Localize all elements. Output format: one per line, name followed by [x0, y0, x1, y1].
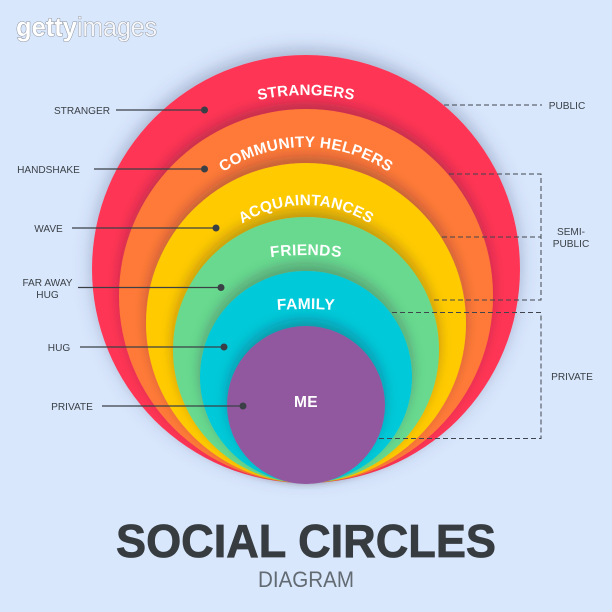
callout: wave: WAVE [34, 224, 63, 235]
circle: friends [173, 217, 439, 483]
label: strangers: STRANGERS [258, 84, 354, 100]
right brackets [378, 105, 542, 438]
watermark: gettyimages [16, 12, 157, 42]
callout: far away hug: FAR AWAY [22, 278, 73, 289]
watermark: gettyimages: images [77, 12, 157, 42]
right labels [549, 101, 593, 383]
label: me: ME [294, 394, 318, 411]
bracket: public [444, 104, 542, 106]
label: semi-public: PUBLIC [553, 239, 589, 250]
title: SOCIAL CIRCLES [116, 515, 496, 567]
callout: wave [34, 224, 220, 235]
circle: strangers [92, 55, 520, 483]
callout: stranger [54, 106, 208, 117]
circle: community helpers [119, 109, 493, 483]
circle labels [220, 84, 392, 411]
callout: private: PRIVATE [51, 402, 93, 413]
label: community helpers: COMMUNITY HELPERS [220, 136, 392, 170]
callout: far away hug: HUG [36, 290, 59, 301]
concentric circles diagram [92, 55, 520, 484]
label: friends: FRIENDS [270, 244, 341, 258]
bracket: private [378, 312, 541, 438]
label: public: PUBLIC [549, 101, 585, 112]
label: family: FAMILY [278, 298, 335, 310]
callout: handshake: HANDSHAKE [17, 165, 80, 176]
label: private: PRIVATE [551, 372, 593, 383]
watermark: gettyimages: getty [16, 12, 77, 42]
label: acquaintances: ACQUAINTANCES [240, 194, 374, 224]
callout: private [51, 402, 246, 413]
subtitle: DIAGRAM [258, 567, 354, 592]
circle: me [227, 326, 385, 484]
left callouts [17, 106, 246, 413]
callout: stranger: STRANGER [54, 106, 110, 117]
label: semi-public: SEMI- [557, 227, 585, 238]
circle: acquaintances [146, 163, 466, 483]
callout: handshake [17, 165, 208, 176]
bracket: semi-public [432, 174, 541, 300]
callout: far away hug [22, 278, 224, 301]
callout: hug: HUG [48, 343, 70, 354]
callout: hug [48, 343, 228, 354]
circle: family [200, 271, 412, 483]
